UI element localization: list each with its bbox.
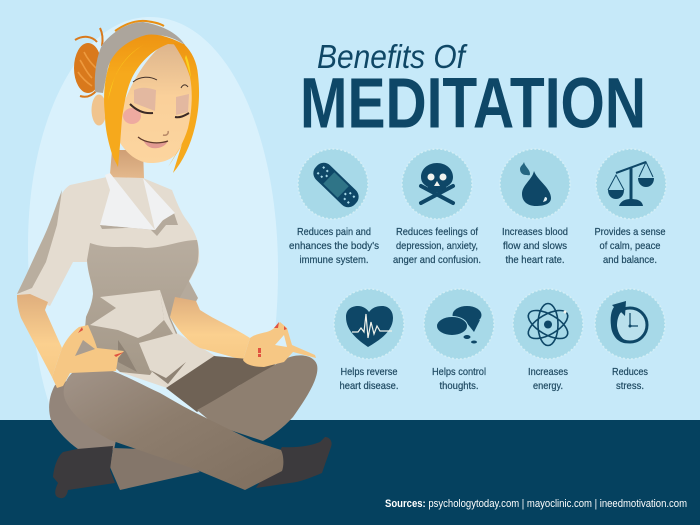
caption: the heart rate. (506, 254, 564, 266)
collar shadow (100, 213, 178, 236)
far arm (170, 297, 250, 360)
caption: Provides a sense (594, 226, 666, 238)
eyebrows (133, 77, 188, 88)
caption: Reduces feelings of (396, 226, 478, 238)
headband top edge (115, 21, 164, 31)
icon: atom (513, 289, 583, 359)
benefit: blood flow (500, 149, 570, 266)
caption: Increases (528, 366, 568, 378)
icon: thought bubbles (424, 289, 494, 359)
headband (95, 22, 185, 93)
shirt: sleeve and torso (17, 177, 217, 388)
caption: Reduces pain and (297, 226, 371, 238)
nose (163, 131, 168, 135)
caption: Reduces (612, 366, 648, 378)
near hand (52, 325, 124, 388)
benefit: energy (513, 289, 583, 392)
lower shin (110, 448, 200, 490)
ear (92, 94, 106, 126)
caption: of calm, peace (600, 240, 661, 252)
benefit: pain relief (289, 149, 379, 266)
caption: Helps reverse (340, 366, 398, 378)
floor band (0, 420, 700, 525)
crossed legs (49, 355, 332, 498)
collar left (100, 173, 155, 230)
benefit: stress (595, 289, 665, 392)
neck (110, 150, 155, 231)
caption: Increases blood (502, 226, 568, 238)
caption: and balance. (603, 254, 657, 266)
caption: stress. (616, 380, 644, 392)
caption: anger and confusion. (393, 254, 481, 266)
illustration: meditating woman (17, 21, 332, 498)
eyeshadow (134, 88, 189, 115)
benefit: mood (393, 149, 481, 266)
benefit: thoughts (424, 289, 494, 392)
far hand (243, 322, 316, 367)
cheek blush (123, 108, 141, 124)
chest and waist shading (84, 240, 198, 375)
face (116, 42, 193, 163)
halo ellipse behind figure (28, 17, 278, 420)
shaded lap (166, 356, 300, 412)
heading: Benefits Of: Benefits Of (317, 38, 468, 75)
icon: balance scale (596, 149, 666, 219)
sleeve shadow (17, 190, 62, 294)
benefit: calm (594, 149, 666, 266)
caption: immune system. (300, 254, 368, 266)
far sleeve (175, 270, 198, 305)
hair (104, 35, 199, 173)
icon: skull and crossbones (402, 149, 472, 219)
caption: heart disease. (340, 380, 398, 392)
icon: bandage (298, 149, 368, 219)
mouth (143, 140, 168, 148)
closed eyes (130, 104, 189, 117)
front leg (64, 366, 283, 490)
icon: clock with arrow (595, 289, 665, 359)
caption: thoughts. (440, 380, 478, 392)
right foot (256, 437, 332, 488)
benefit: heart (334, 289, 404, 392)
collar right (143, 178, 175, 230)
caption: Helps control (432, 366, 486, 378)
icon: heart with pulse (334, 289, 404, 359)
caption: depression, anxiety, (396, 240, 478, 252)
left hip (49, 380, 120, 450)
caption: enhances the body's (289, 240, 379, 252)
left foot (53, 446, 115, 498)
caption: flow and slows (503, 240, 567, 252)
title (300, 38, 646, 144)
icon: blood drops (500, 149, 570, 219)
back thigh right (197, 355, 317, 441)
near arm (17, 294, 62, 377)
caption: energy. (533, 380, 563, 392)
hair bun (74, 28, 103, 97)
shirt folds (90, 290, 164, 338)
